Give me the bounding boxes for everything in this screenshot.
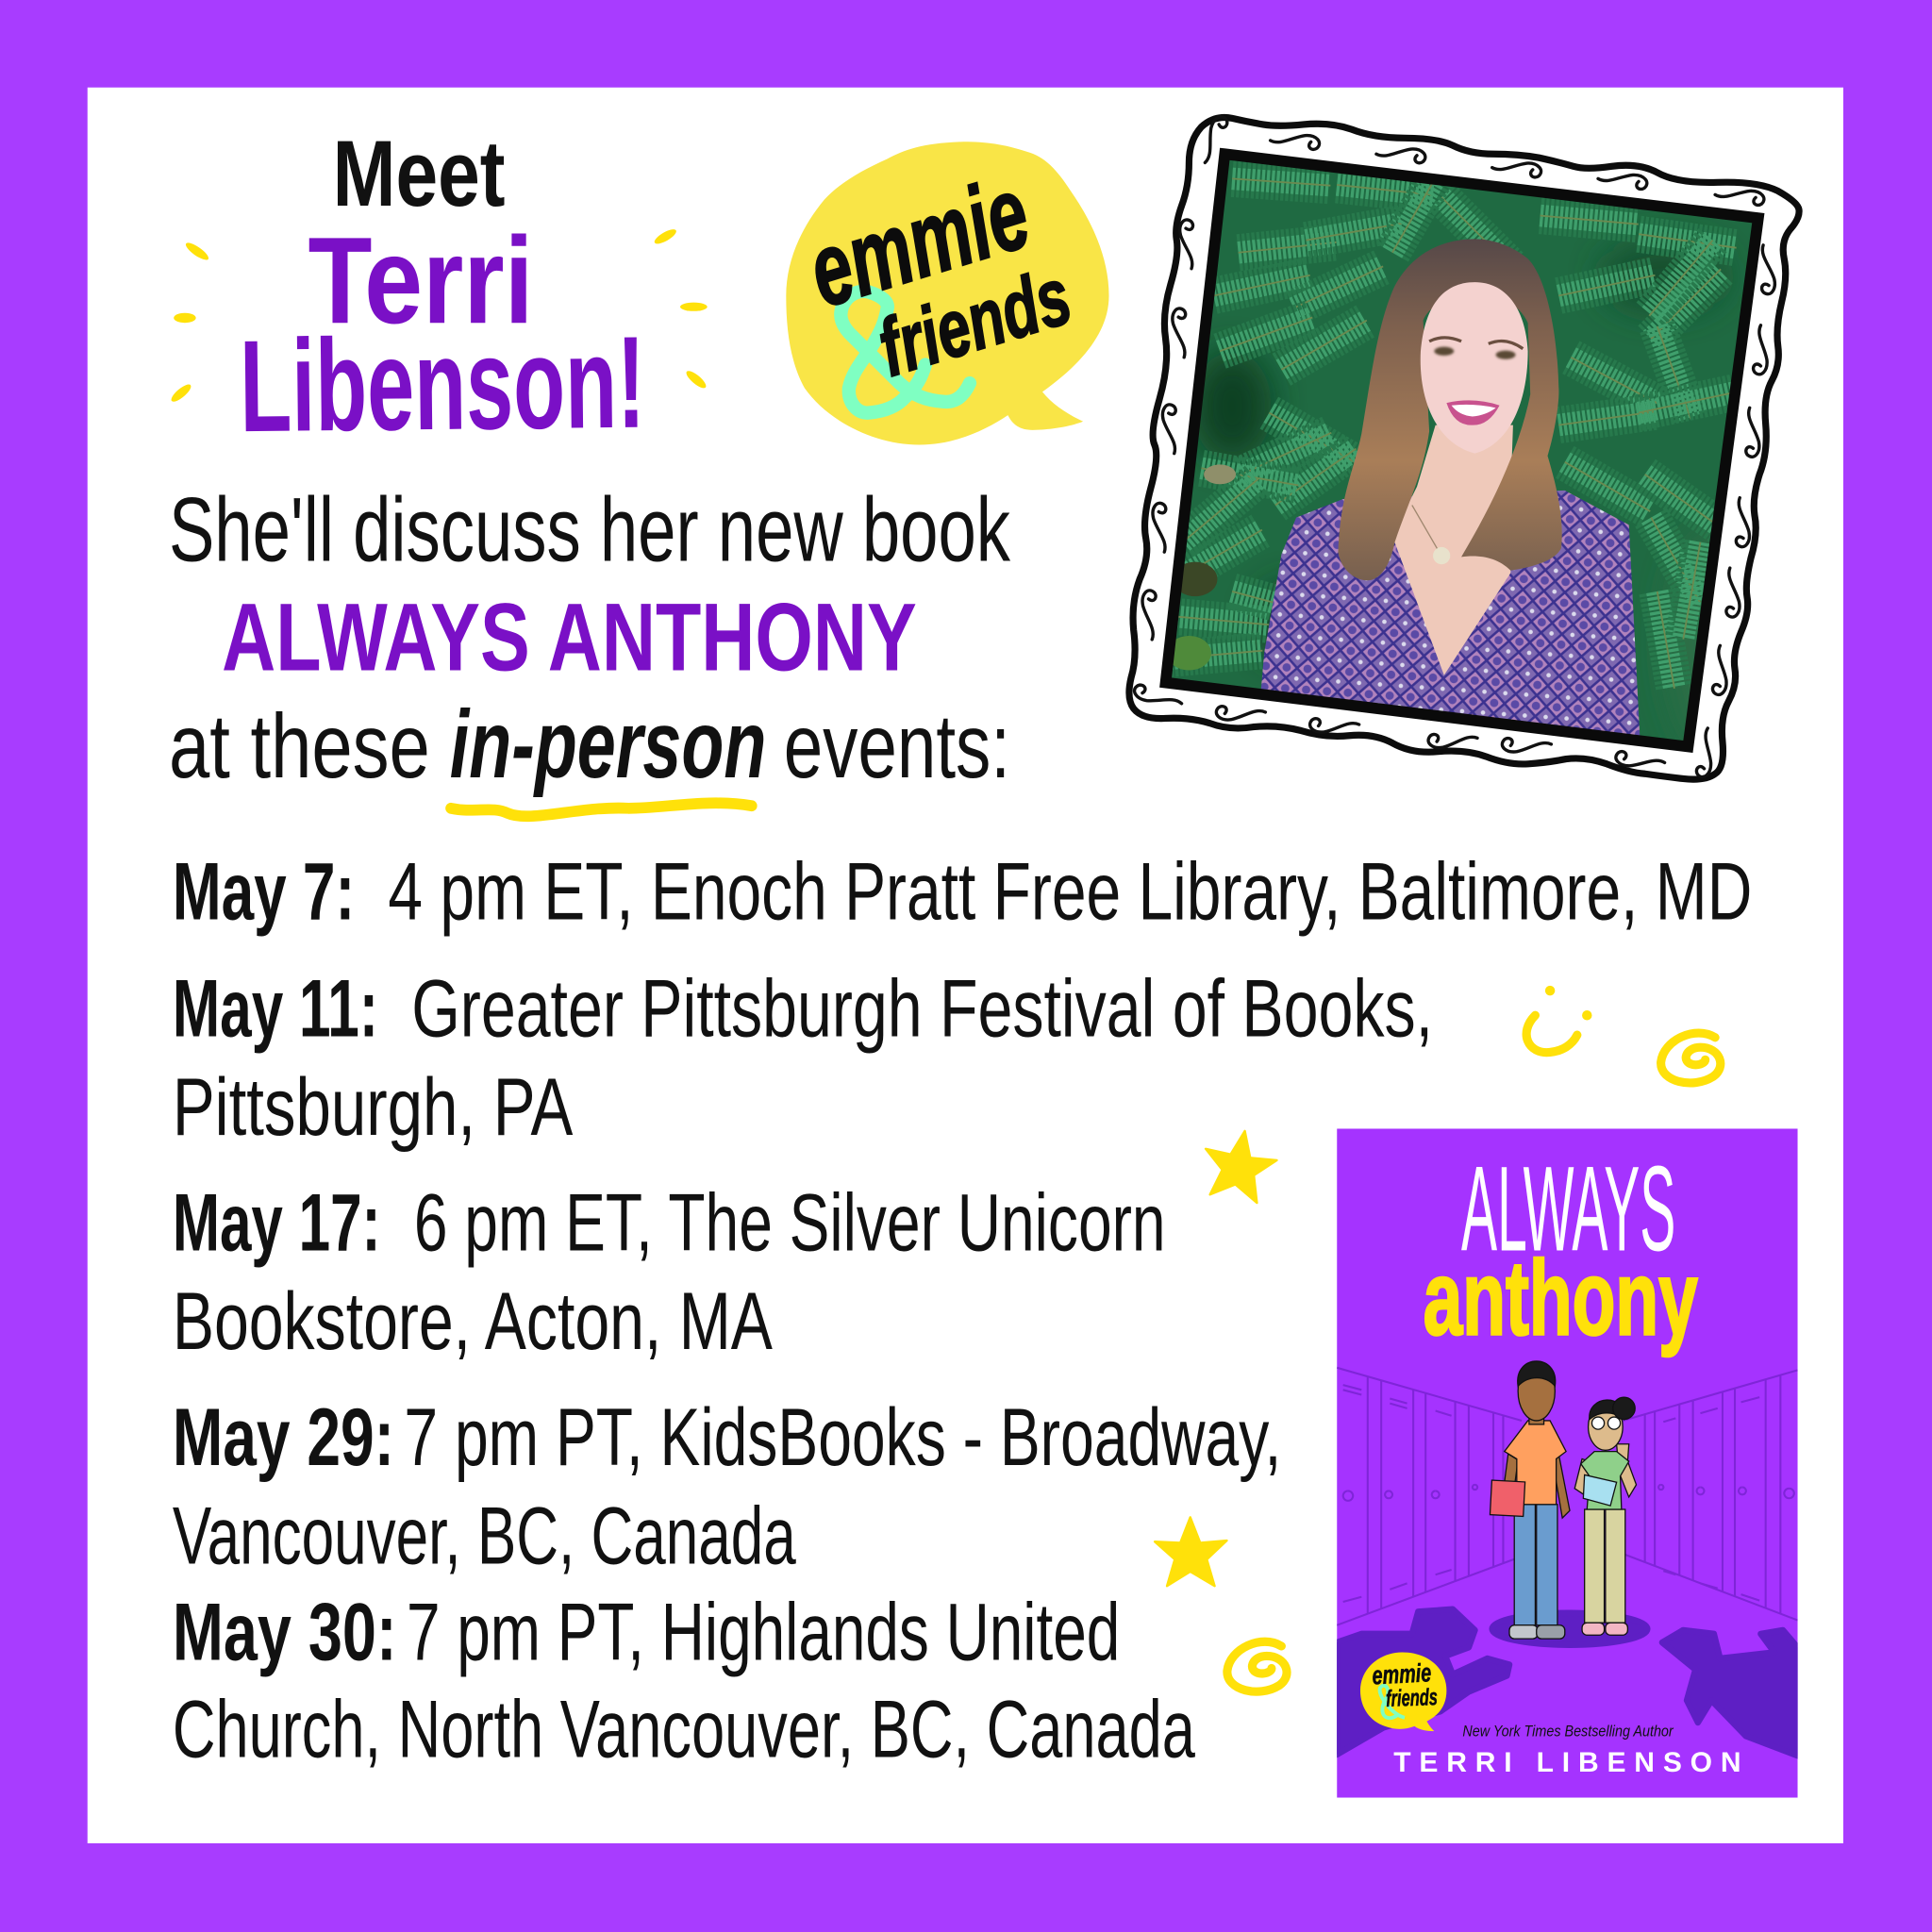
- cover author name: TERRI LIBENSON: [1393, 1747, 1741, 1778]
- event: May 11: [173, 963, 1433, 1153]
- spruce background: [1172, 160, 1753, 741]
- icon: yellow sparkle dashes: [169, 226, 708, 405]
- event: May 30: 7 pm PT, Highlands United: [407, 1587, 1120, 1677]
- intro text: [169, 479, 1011, 798]
- speech bubble shape: [786, 142, 1109, 445]
- photo black border: [1166, 154, 1758, 747]
- eyes: [1434, 347, 1516, 359]
- cover logo bubble: friends: [1386, 1685, 1438, 1712]
- cover logo bubble: [1360, 1653, 1446, 1731]
- neck and chest: [1392, 425, 1513, 675]
- cover tagline: New York Times Bestselling Author: [1462, 1722, 1674, 1740]
- doodle: star bottom: [1155, 1517, 1227, 1586]
- logo word: friends: friends: [869, 251, 1081, 394]
- event: May 17: [173, 1178, 1166, 1367]
- event: May 11: Greater Pittsburgh Festival of Books,: [411, 963, 1433, 1054]
- logo: emmie and friends speech bubble: [786, 142, 1109, 445]
- heading line: Libenson: Libenson!: [239, 310, 646, 459]
- logo word: emmie: emmie: [796, 155, 1041, 329]
- hair: [1338, 239, 1562, 580]
- book cover: Always Anthony: [1337, 1128, 1798, 1798]
- intro line 3: events:: [784, 696, 1010, 797]
- intro line 3: [169, 691, 1010, 798]
- heading line: Terri: Terri: [308, 211, 534, 349]
- yellow underline: [451, 803, 752, 816]
- intro line 3: at these: [169, 696, 430, 797]
- event: May 29: [173, 1392, 1281, 1581]
- floor shadows of bullies: [1337, 1609, 1798, 1756]
- event: May 17: 6 pm ET, The Silver Unicorn: [414, 1178, 1166, 1269]
- event: May 30: Church, North Vancouver, BC, Canada: [173, 1685, 1195, 1775]
- doodle: spiral bottom: [1227, 1641, 1287, 1691]
- smile: [1446, 400, 1500, 425]
- necklace pendant: [1412, 506, 1440, 552]
- blouse: [1257, 491, 1640, 740]
- character: boy with book: [1490, 1361, 1570, 1639]
- eyebrows: [1429, 338, 1523, 349]
- wavy frame outline: [1129, 117, 1799, 779]
- cover logo bubble: emmie: [1372, 1657, 1432, 1690]
- intro line 1: She'll discuss her new book: [169, 479, 1011, 580]
- doodle: star top: [1198, 1124, 1281, 1205]
- event: May 11: Pittsburgh, PA: [173, 1062, 574, 1153]
- cover background: [1337, 1128, 1798, 1798]
- book cover: Always Anthony: ALWAYS: [1461, 1142, 1675, 1277]
- event: May 30: May 30:: [173, 1587, 397, 1677]
- intro line 3: in-person: [450, 691, 766, 798]
- event list: [173, 846, 1752, 1775]
- heading: Meet Terri Libenson: [239, 122, 646, 459]
- event: May 29: 7 pm PT, KidsBooks - Broadway,: [404, 1392, 1281, 1483]
- frame swirls: [1133, 114, 1776, 777]
- face: [1421, 282, 1528, 454]
- event: May 30: [173, 1587, 1195, 1775]
- doodle: spiral top: [1661, 1033, 1721, 1083]
- event: May 11: May 11:: [173, 963, 378, 1054]
- event: May 17: May 17:: [173, 1178, 381, 1269]
- event: May 29: May 29:: [173, 1392, 394, 1483]
- book title: ALWAYS ANTHONY: [222, 584, 917, 691]
- lockers: [1337, 1368, 1798, 1625]
- event: May 7: May 7:: [173, 846, 355, 937]
- event: May 29: Vancouver, BC, Canada: [173, 1491, 796, 1581]
- photo: smiling author against spruce tree: [1172, 160, 1753, 741]
- ampersand: [841, 291, 970, 413]
- heading line: Meet: Meet: [333, 122, 506, 226]
- doodle: smiley: [1526, 986, 1592, 1053]
- author photo in hand-drawn frame: [1129, 114, 1799, 779]
- cover title: anthony: anthony: [1424, 1239, 1698, 1357]
- character: girl with tablet: [1574, 1397, 1637, 1635]
- event: May 17: Bookstore, Acton, MA: [173, 1276, 773, 1367]
